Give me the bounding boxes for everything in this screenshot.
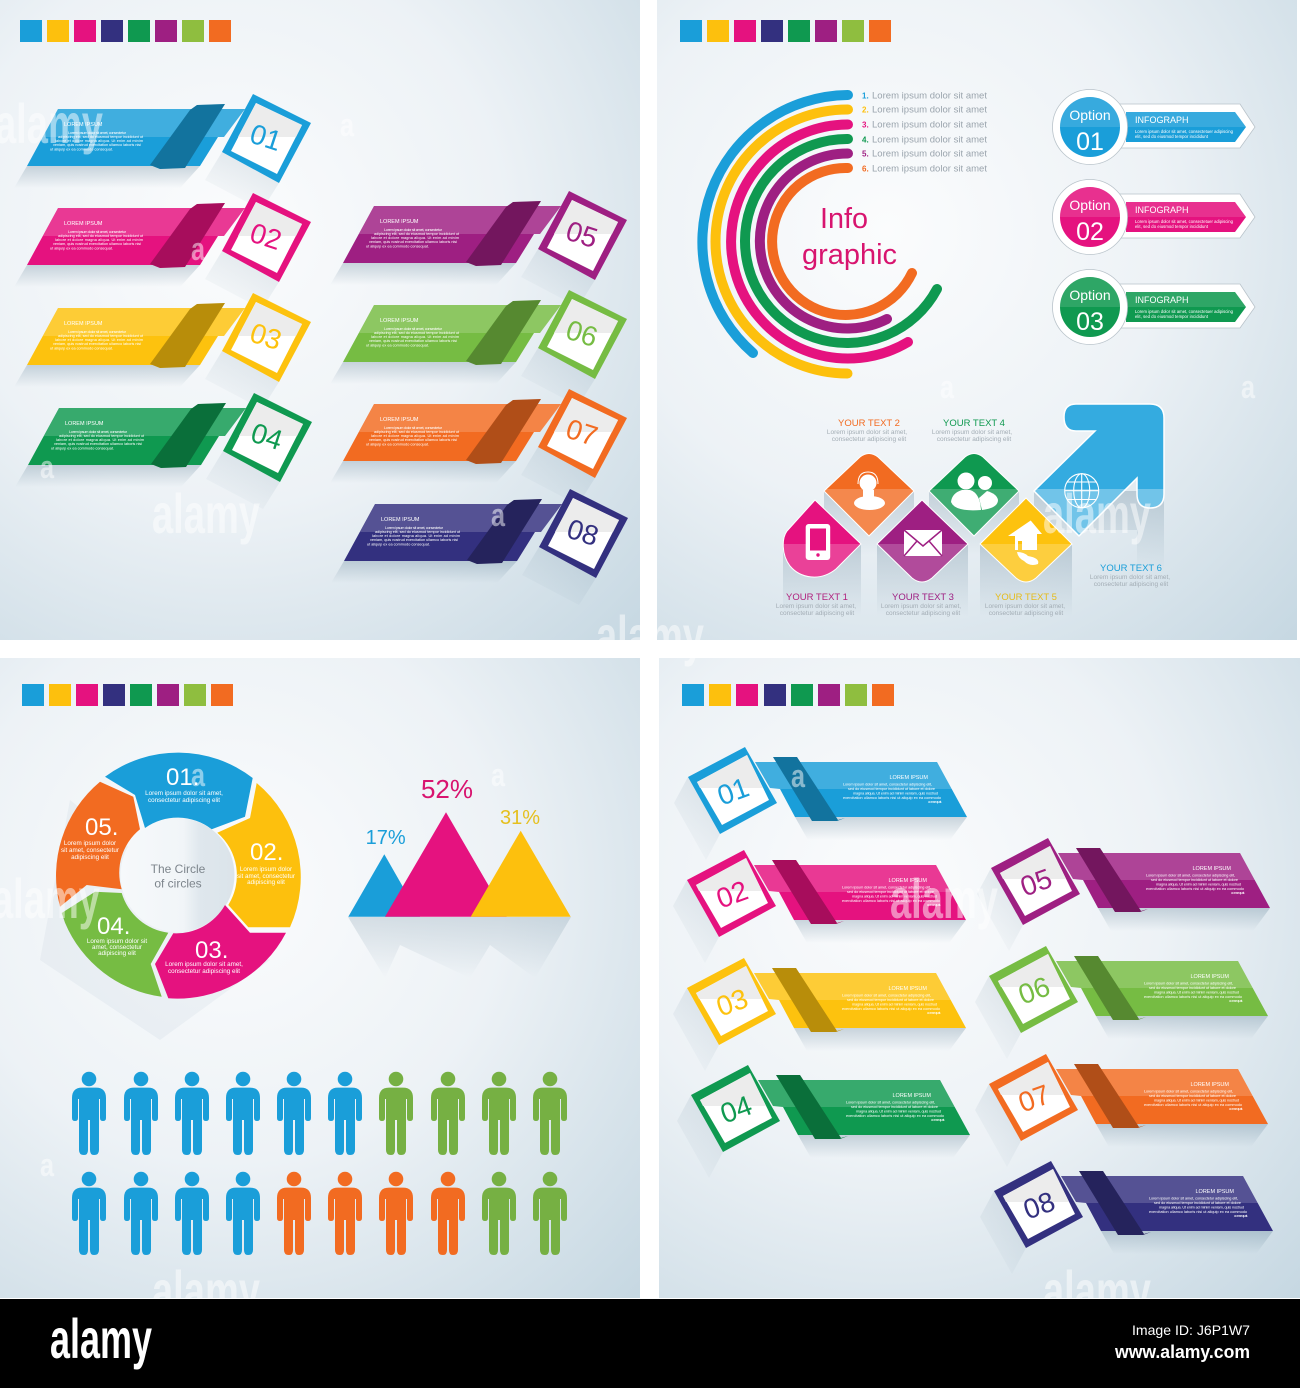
banner 01: LOREM IPSUM [64, 122, 103, 128]
triangle chart: 31% [500, 807, 540, 829]
banner 06: LOREM IPSUM [1190, 974, 1229, 980]
banner 02: ut aliquip ex ea commodo consequat. [50, 246, 113, 250]
banner 07: veniam, quis nostrud exercitation ullamco laboris nisi [369, 438, 457, 442]
banner 05: magna aliqua. Ut enim ad minim veniam, quis nostrud [1156, 882, 1241, 886]
banner 02: exercitation ullamco laboris nisi ut aliquip ex ea commodo [842, 899, 940, 903]
banner 04: sed do eiusmod tempor incididunt ut labore et dolore [851, 1105, 938, 1109]
banner 08: labore et dolore magna aliqua. Ut enim ad minim [372, 534, 460, 538]
banner 08 [980, 1161, 1273, 1274]
banner 07: 07 [562, 413, 601, 452]
arc legend list: Lorem ipsum dolor sit amet [872, 164, 987, 174]
icon labels: YOUR TEXT 4 [943, 418, 1005, 429]
banner 05: LOREM IPSUM [380, 219, 419, 225]
circle chart: 02. [250, 839, 283, 866]
banner 07: adipiscing elit, sed do eiusmod tempor incididunt ut [374, 430, 460, 434]
banner 05 [330, 191, 627, 307]
banner 06: 06 [1014, 971, 1054, 1010]
icon labels: YOUR TEXT 2 [838, 418, 900, 429]
banner 03: LOREM IPSUM [888, 986, 927, 992]
circle chart: Lorem ipsum dolor sit amet, [145, 790, 223, 797]
banner 03: sed do eiusmod tempor incididunt ut labore et dolore [847, 998, 934, 1002]
banner 01: 01 [713, 772, 753, 811]
banner 02: veniam, quis nostrud exercitation ullamco laboris nisi [53, 242, 141, 246]
banner 05: Lorem ipsum dolor sit amet, consectetur adipiscing elit, [1146, 874, 1235, 878]
colour swatches [682, 684, 894, 706]
icon labels: consectetur adipiscing elit [832, 436, 906, 443]
banner 04: LOREM IPSUM [65, 421, 104, 427]
watermarks: a [191, 757, 205, 793]
watermarks: alamy [596, 604, 704, 667]
banner 08: LOREM IPSUM [1195, 1189, 1234, 1195]
panel: circle chart, triangles, people [0, 658, 640, 1298]
option 02: 02 [1076, 218, 1104, 246]
watermarks: alamy [152, 1259, 260, 1322]
banner 03: 03 [246, 317, 285, 356]
watermarks: a [340, 107, 354, 143]
arc legend list: Lorem ipsum dolor sit amet [872, 134, 987, 146]
banner 04: Lorem ipsum dolor sit amet, consectetur adipiscing elit, [846, 1100, 935, 1104]
banner 01 [674, 747, 967, 860]
circle chart: Lorem ipsum dolor [64, 840, 116, 847]
banner 06: magna aliqua. Ut enim ad minim veniam, quis nostrud [1154, 990, 1239, 994]
banner 06: LOREM IPSUM [380, 318, 419, 324]
banner 04: 04 [716, 1090, 756, 1129]
banner 07: LOREM IPSUM [1190, 1082, 1229, 1088]
arc legend list: 1. [862, 92, 869, 100]
banner 04: veniam, quis nostrud exercitation ullamco laboris nisi [54, 442, 142, 446]
banner 04: 04 [247, 417, 286, 456]
banner 07: LOREM IPSUM [380, 417, 419, 423]
option 01: Lorem ipsum dolor sit amet, consectetuer adipiscing [1135, 129, 1234, 134]
banner 05: Lorem ipsum dolor sit amet, consectetur [384, 228, 443, 232]
banner 04: labore et dolore magna aliqua. Ut enim ad minim [56, 438, 144, 442]
panel: circular arcs, options and icons [657, 0, 1297, 640]
watermarks: a [40, 449, 54, 485]
banner 04: ut aliquip ex ea commodo consequat. [51, 446, 114, 450]
banner 08: exercitation ullamco laboris nisi ut aliquip ex ea commodo [1149, 1210, 1247, 1214]
circle chart: consectetur adipiscing elit [148, 797, 220, 804]
icon labels: Lorem ipsum dolor sit amet, [827, 429, 907, 436]
banner 08: LOREM IPSUM [381, 517, 420, 523]
banner 05: adipiscing elit, sed do eiusmod tempor incididunt ut [374, 232, 460, 236]
banner 06: sed do eiusmod tempor incididunt ut labore et dolore [1149, 986, 1236, 990]
banner 07: exercitation ullamco laboris nisi ut aliquip ex ea commodo [1144, 1103, 1242, 1107]
icon: house diamond [980, 498, 1072, 582]
banner 02: consequat. [927, 903, 941, 907]
banner 07: sed do eiusmod tempor incididunt ut labore et dolore [1149, 1094, 1236, 1098]
banner 02 [14, 193, 311, 309]
banner 06: consequat. [1229, 999, 1243, 1003]
people pictogram row 1 [72, 1072, 567, 1155]
banner 01: veniam, quis nostrud exercitation ullamco laboris nisi [53, 143, 141, 147]
arc legend list: 3. [862, 120, 869, 130]
banner 07: Lorem ipsum dolor sit amet, consectetur [384, 426, 443, 430]
banner 06: adipiscing elit, sed do eiusmod tempor incididunt ut [374, 331, 460, 335]
banner 01: exercitation ullamco laboris nisi ut aliquip ex ea commodo [843, 796, 941, 800]
banner 02: LOREM IPSUM [64, 221, 103, 227]
banner 02: Lorem ipsum dolor sit amet, consectetur adipiscing elit, [842, 886, 931, 890]
arc legend list: 2. [862, 106, 869, 114]
circle chart: adipiscing elit [247, 879, 285, 886]
banner 04: consequat. [931, 1118, 945, 1122]
banner 04: Lorem ipsum dolor sit amet, consectetur [69, 430, 128, 434]
banner 05: exercitation ullamco laboris nisi ut aliquip ex ea commodo [1146, 887, 1244, 891]
option 03: Lorem ipsum dolor sit amet, consectetuer adipiscing [1135, 309, 1234, 314]
banner 03: labore et dolore magna aliqua. Ut enim ad minim [55, 338, 143, 342]
option 03: elit, sed do eiusmod tempor incididunt [1135, 314, 1209, 319]
watermarks: a [40, 1147, 54, 1183]
watermarks: a [191, 231, 205, 267]
banner 05: sed do eiusmod tempor incididunt ut labore et dolore [1151, 878, 1238, 882]
icon labels: YOUR TEXT 1 [786, 592, 848, 603]
option 02: Option [1069, 197, 1111, 213]
banner 03: Lorem ipsum dolor sit amet, consectetur adipiscing elit, [842, 994, 931, 998]
triangle chart: 52% [421, 774, 473, 804]
option 02: elit, sed do eiusmod tempor incididunt [1135, 224, 1209, 229]
banner 02: adipiscing elit, sed do eiusmod tempor incididunt ut [58, 234, 144, 238]
circle chart: sit amet, consectetur [237, 873, 295, 880]
banner 02: magna aliqua. Ut enim ad minim veniam, quis nostrud [852, 894, 937, 898]
banner 01 [14, 94, 311, 210]
banner 03: consequat. [927, 1011, 941, 1015]
banner 02: 02 [246, 217, 285, 256]
footer bar: Image ID: J6P1W7 [1132, 1322, 1250, 1338]
circle chart: 03. [195, 937, 228, 964]
footer bar: alamy [50, 1307, 152, 1370]
icon labels: Lorem ipsum dolor sit amet, [985, 603, 1065, 610]
triangle chart: 17% [366, 827, 406, 849]
arc title: graphic [802, 239, 897, 271]
banner 01: 01 [246, 118, 285, 157]
banner 06 [975, 946, 1268, 1059]
banner 01: labore et dolore magna aliqua. Ut enim ad minim [55, 139, 143, 143]
circle chart: adipiscing elit [98, 950, 136, 957]
circle chart: The Circle [151, 862, 206, 876]
banner 03: ut aliquip ex ea commodo consequat. [50, 346, 113, 350]
icon labels: YOUR TEXT 6 [1100, 563, 1162, 574]
banner 01: adipiscing elit, sed do eiusmod tempor incididunt ut [58, 135, 144, 139]
banner 03 [673, 958, 966, 1071]
colour swatches [22, 684, 233, 706]
option 02 [1052, 180, 1255, 254]
watermarks: alamy [1043, 1259, 1151, 1322]
icon: people diamond [929, 454, 1019, 536]
banner 06: Lorem ipsum dolor sit amet, consectetur adipiscing elit, [1144, 982, 1233, 986]
banner 06: Lorem ipsum dolor sit amet, consectetur [384, 327, 443, 331]
banner 06: ut aliquip ex ea commodo consequat. [366, 344, 429, 348]
footer bar: www.alamy.com [1114, 1342, 1250, 1362]
icon: phone teardrop [783, 500, 861, 577]
banner 08: Lorem ipsum dolor sit amet, consectetur [385, 526, 444, 530]
icon labels: YOUR TEXT 5 [995, 592, 1057, 603]
banner 08: adipiscing elit, sed do eiusmod tempor incididunt ut [375, 530, 461, 534]
option 03 [1052, 270, 1255, 344]
circle chart: 04. [97, 913, 130, 940]
watermarks: a [940, 369, 954, 405]
arc legend list: Lorem ipsum dolor sit amet [872, 104, 987, 116]
icon labels: consectetur adipiscing elit [780, 610, 854, 617]
banner 08: magna aliqua. Ut enim ad minim veniam, quis nostrud [1159, 1206, 1244, 1210]
option 02: Lorem ipsum dolor sit amet, consectetuer adipiscing [1135, 219, 1234, 224]
banner 08: consequat. [1234, 1214, 1248, 1218]
arc legend list: 5. [862, 150, 869, 158]
banner 05: labore et dolore magna aliqua. Ut enim ad minim [371, 236, 459, 240]
icon labels [776, 418, 1170, 617]
circle chart: Lorem ipsum dolor sit [87, 938, 147, 945]
colour swatches [20, 20, 231, 42]
banner 05: ut aliquip ex ea commodo consequat. [366, 244, 429, 248]
banner 03: veniam, quis nostrud exercitation ullamco laboris nisi [53, 342, 141, 346]
option 03: 03 [1076, 308, 1104, 336]
option 01: 01 [1076, 128, 1104, 156]
banner 02: LOREM IPSUM [888, 878, 927, 884]
option 01 [1052, 90, 1255, 164]
banner 04: exercitation ullamco laboris nisi ut aliquip ex ea commodo [846, 1114, 944, 1118]
watermarks: alamy [152, 482, 260, 545]
banner 06: labore et dolore magna aliqua. Ut enim ad minim [371, 335, 459, 339]
banner 04 [15, 393, 312, 509]
banner 08: Lorem ipsum dolor sit amet, consectetur adipiscing elit, [1149, 1196, 1238, 1200]
banner 03: 03 [712, 983, 752, 1022]
banner 03: Lorem ipsum dolor sit amet, consectetur [68, 330, 127, 334]
arc legend list: Lorem ipsum dolor sit amet [872, 90, 987, 102]
banner 03: exercitation ullamco laboris nisi ut aliquip ex ea commodo [842, 1007, 940, 1011]
circle chart: sit amet, consectetur [61, 847, 119, 854]
banner 05: 05 [1016, 863, 1056, 902]
banner 03 [14, 293, 311, 409]
icon labels: Lorem ipsum dolor sit amet, [776, 603, 856, 610]
banner 07: magna aliqua. Ut enim ad minim veniam, quis nostrud [1154, 1098, 1239, 1102]
banner 07: 07 [1014, 1079, 1054, 1118]
banner 02: sed do eiusmod tempor incididunt ut labore et dolore [847, 890, 934, 894]
banner 08: 08 [563, 513, 602, 552]
triangle chart [348, 774, 571, 978]
banner 06 [330, 290, 627, 406]
circle chart: 01. [166, 764, 199, 791]
option 01: Option [1069, 107, 1111, 123]
footer bar [0, 1299, 1300, 1388]
arc legend list: Lorem ipsum dolor sit amet [872, 148, 987, 160]
banner 03: adipiscing elit, sed do eiusmod tempor incididunt ut [58, 334, 144, 338]
circle chart: Lorem ipsum dolor sit amet, [165, 961, 243, 968]
banner 05: 05 [562, 215, 601, 254]
banner 08: veniam, quis nostrud exercitation ullamco laboris nisi [370, 538, 458, 542]
icon: mail diamond [877, 500, 968, 582]
colour swatches [680, 20, 891, 42]
arc legend list: Lorem ipsum dolor sit amet [872, 120, 987, 130]
option 01: INFOGRAPH [1135, 115, 1189, 125]
banner 01: consequat. [928, 800, 942, 804]
banner 02: labore et dolore magna aliqua. Ut enim ad minim [55, 238, 143, 242]
banner 02: 02 [712, 875, 752, 914]
arc legend list [862, 90, 987, 174]
watermarks: a [1241, 369, 1255, 405]
banner 07: ut aliquip ex ea commodo consequat. [366, 442, 429, 446]
circle chart: Lorem ipsum dolor [240, 866, 292, 873]
icon labels: Lorem ipsum dolor sit amet, [1090, 574, 1170, 581]
watermarks: alamy [1043, 482, 1151, 545]
icon labels: consectetur adipiscing elit [989, 610, 1063, 617]
circle chart [40, 753, 301, 1040]
panel: ribbon banners right [659, 658, 1300, 1298]
banner 07: consequat. [1229, 1107, 1243, 1111]
arc title [802, 203, 897, 271]
option 03: INFOGRAPH [1135, 295, 1189, 305]
banner 07: labore et dolore magna aliqua. Ut enim ad minim [371, 434, 459, 438]
banner 01: magna aliqua. Ut enim ad minim veniam, quis nostrud [853, 792, 938, 796]
growth arrow with globe icon [1034, 404, 1164, 536]
icon: headset diamond [824, 454, 914, 536]
icon labels: consectetur adipiscing elit [937, 436, 1011, 443]
banner 05: consequat. [1231, 891, 1245, 895]
banner 07 [330, 389, 627, 505]
banner 08: 08 [1019, 1186, 1059, 1225]
banner 07: Lorem ipsum dolor sit amet, consectetur adipiscing elit, [1144, 1090, 1233, 1094]
arc title: Info [820, 203, 868, 235]
watermarks: a [491, 757, 505, 793]
banner 06: 06 [562, 314, 601, 353]
banner 01: ut aliquip ex ea commodo consequat. [50, 148, 113, 152]
icon labels: consectetur adipiscing elit [886, 610, 960, 617]
banner 04 [677, 1065, 970, 1178]
icon shadows [783, 491, 1164, 616]
banner 07 [975, 1054, 1268, 1167]
banner 01: LOREM IPSUM [889, 775, 928, 781]
circle chart: 05. [85, 814, 118, 841]
banner 05: veniam, quis nostrud exercitation ullamco laboris nisi [369, 240, 457, 244]
icon labels: YOUR TEXT 3 [892, 592, 954, 603]
banner 08: sed do eiusmod tempor incididunt ut labore et dolore [1154, 1201, 1241, 1205]
people pictogram row 2 [72, 1172, 567, 1255]
banner 04: magna aliqua. Ut enim ad minim veniam, quis nostrud [856, 1110, 941, 1114]
circle chart: adipiscing elit [71, 854, 109, 861]
watermarks: alamy [890, 867, 998, 930]
banner 01: sed do eiusmod tempor incididunt ut labore et dolore [848, 787, 935, 791]
banner 05: LOREM IPSUM [1192, 866, 1231, 872]
banner 08 [331, 489, 628, 605]
panel: ribbon banners left [0, 0, 640, 640]
option 03: Option [1069, 287, 1111, 303]
watermarks: a [791, 758, 805, 794]
circle chart: consectetur adipiscing elit [168, 968, 240, 975]
banner 01: Lorem ipsum dolor sit amet, consectetur adipiscing elit, [843, 782, 932, 786]
option 01: elit, sed do eiusmod tempor incididunt [1135, 134, 1209, 139]
banner 06: exercitation ullamco laboris nisi ut aliquip ex ea commodo [1144, 995, 1242, 999]
icon labels: Lorem ipsum dolor sit amet, [932, 429, 1012, 436]
banner 02 [673, 850, 966, 963]
concentric arc chart [702, 95, 937, 374]
watermarks: a [491, 497, 505, 533]
banner 06: veniam, quis nostrud exercitation ullamco laboris nisi [369, 339, 457, 343]
banner 05 [977, 838, 1270, 951]
banner 08: ut aliquip ex ea commodo consequat. [367, 542, 430, 546]
circle chart: of circles [154, 876, 202, 890]
icon labels: Lorem ipsum dolor sit amet, [881, 603, 961, 610]
banner 01: Lorem ipsum dolor sit amet, consectetur [68, 131, 127, 135]
arc legend list: 6. [862, 164, 869, 174]
banner 03: magna aliqua. Ut enim ad minim veniam, quis nostrud [852, 1002, 937, 1006]
arc legend list: 4. [862, 136, 869, 144]
banner 03: LOREM IPSUM [64, 321, 103, 327]
banner 04: LOREM IPSUM [892, 1093, 931, 1099]
icon labels: consectetur adipiscing elit [1094, 581, 1168, 588]
banner 02: Lorem ipsum dolor sit amet, consectetur [68, 230, 127, 234]
option 02: INFOGRAPH [1135, 205, 1189, 215]
banner 04: adipiscing elit, sed do eiusmod tempor incididunt ut [59, 434, 145, 438]
circle chart: amet, consectetur [92, 944, 142, 951]
